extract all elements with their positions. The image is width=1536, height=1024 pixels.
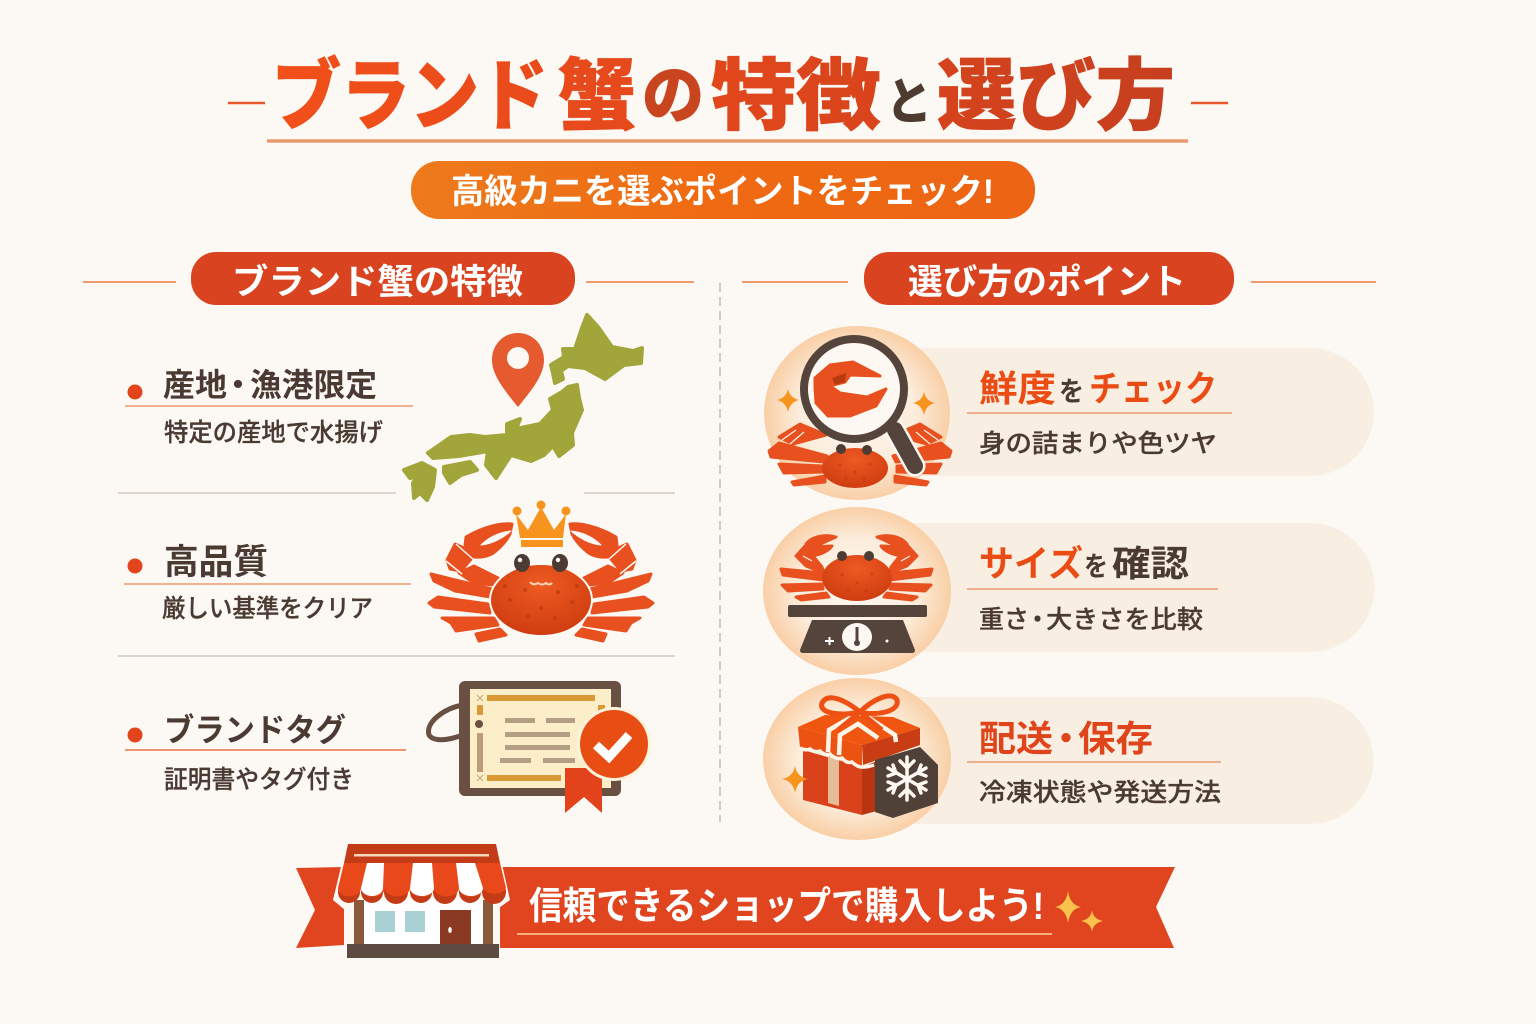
icon: crab under magnifier bbox=[764, 326, 951, 500]
title: 選び方 bbox=[937, 52, 1175, 140]
panel: delivery and storage bbox=[900, 697, 1374, 824]
banner: buy from a trusted shop bbox=[296, 867, 1175, 948]
feature: brand tag: ブランドタグ bbox=[164, 712, 346, 748]
panel: freshness: 鮮度 bbox=[979, 368, 1056, 409]
icon: crab with crown bbox=[429, 500, 653, 641]
icon: crab on scale bbox=[763, 507, 951, 675]
section heading: how to choose bbox=[864, 252, 1234, 305]
feature: quality bbox=[124, 543, 411, 623]
feature: origin: ・ bbox=[222, 367, 254, 403]
title: 特徴 bbox=[711, 52, 881, 140]
panel: size: 確認 bbox=[1112, 543, 1189, 584]
panel: freshness: チェック bbox=[1089, 368, 1217, 409]
panel: freshness: を bbox=[1059, 377, 1084, 407]
panel: freshness: 身の詰まりや色ツヤ bbox=[979, 430, 1217, 458]
section heading: how to choose: 選び方のポイント bbox=[908, 263, 1186, 302]
feature: brand tag: 証明書やタグ付き bbox=[164, 766, 354, 794]
title: ブランド bbox=[272, 52, 548, 140]
feature: quality: 厳しい基準をクリア bbox=[162, 595, 373, 623]
feature: quality: 高品質 bbox=[164, 543, 268, 582]
panel: delivery and storage: ・ bbox=[1048, 718, 1084, 759]
subtitle pill: 高級カニを選ぶポイントをチェック! bbox=[451, 173, 994, 211]
section heading: features: ブランド蟹の特徴 bbox=[232, 262, 523, 302]
feature: origin: 漁港限定 bbox=[250, 367, 377, 403]
panel: size: を bbox=[1084, 552, 1108, 582]
icon: gift box with snowflake bbox=[763, 678, 951, 840]
feature: brand tag bbox=[125, 712, 406, 794]
panel: delivery and storage: 配送 bbox=[979, 718, 1053, 759]
panel: delivery and storage: 冷凍状態や発送方法 bbox=[979, 779, 1221, 807]
title: の bbox=[642, 60, 704, 132]
panel: size bbox=[900, 523, 1374, 652]
panel: size: ・ bbox=[1025, 606, 1050, 634]
subtitle pill bbox=[411, 161, 1035, 219]
section heading: features bbox=[191, 252, 575, 305]
title bbox=[272, 52, 1175, 140]
feature: origin bbox=[125, 367, 413, 447]
feature: origin: 特定の産地で水揚げ bbox=[164, 419, 383, 447]
title: と bbox=[886, 74, 932, 130]
feature: origin: 産地 bbox=[163, 367, 227, 403]
panel: freshness bbox=[900, 348, 1374, 476]
banner: buy from a trusted shop: 信頼できるショップで購入しよう! bbox=[529, 886, 1044, 928]
panel: delivery and storage: 保存 bbox=[1078, 718, 1153, 759]
title: 蟹 bbox=[558, 52, 636, 140]
icon: certificate with seal bbox=[428, 681, 651, 813]
panel: size: 重さ bbox=[979, 606, 1029, 634]
icon: Japan map with pin bbox=[404, 315, 642, 500]
panel: size: サイズ bbox=[979, 543, 1083, 584]
panel: size: 大きさを比較 bbox=[1046, 606, 1203, 634]
icon: shop storefront bbox=[333, 844, 510, 960]
